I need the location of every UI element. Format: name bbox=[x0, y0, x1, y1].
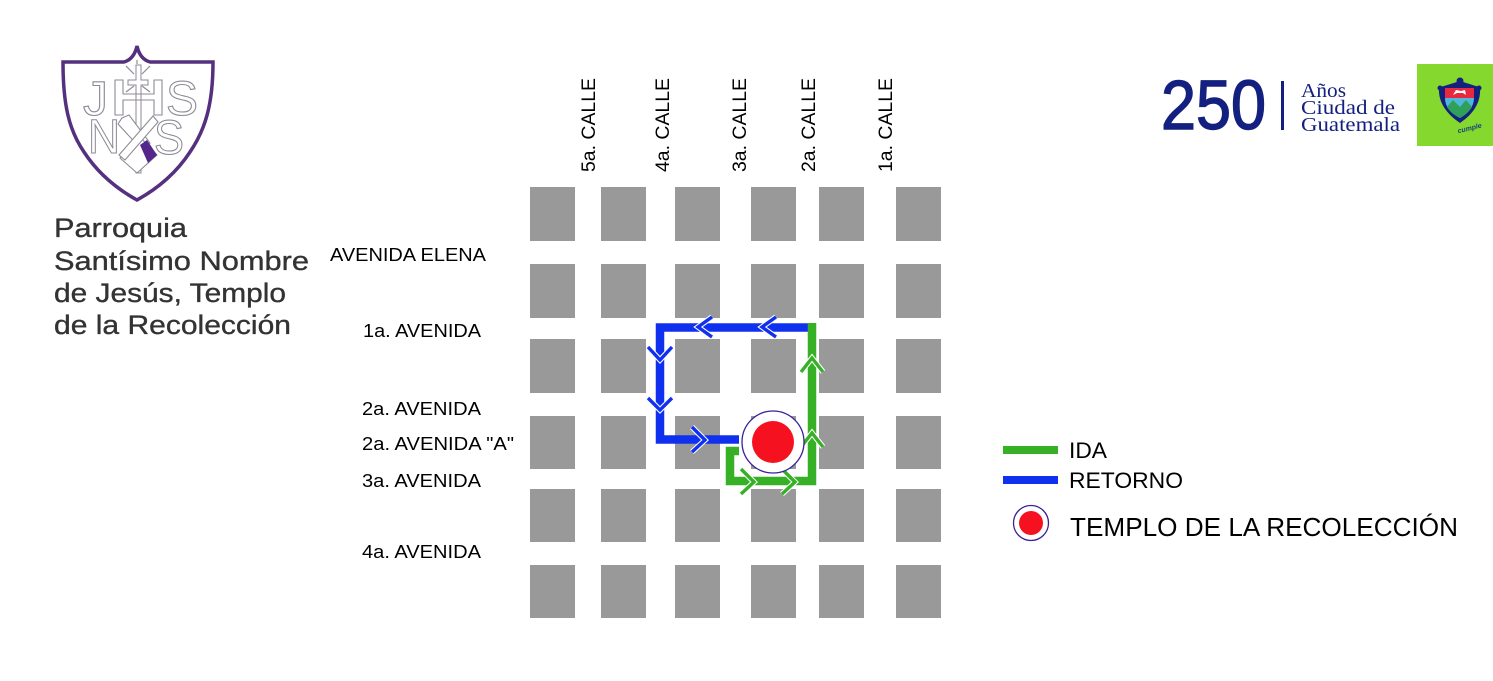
heading: parish name: de la Recolección bbox=[54, 310, 291, 340]
street labels: avenidas: 2a. AVENIDA bbox=[362, 398, 482, 419]
street labels: avenidas bbox=[330, 244, 514, 562]
street labels: avenidas: 1a. AVENIDA bbox=[363, 320, 482, 341]
street labels: avenidas: AVENIDA ELENA bbox=[330, 244, 487, 265]
logo: parish shield: S bbox=[154, 112, 184, 165]
logo: parish shield bbox=[63, 46, 213, 200]
route: retorno (blue) bbox=[648, 317, 808, 452]
logo: parish shield: J bbox=[83, 73, 108, 126]
logo: 250 años Ciudad de Guatemala: Guatemala bbox=[1301, 114, 1400, 136]
logo: 250 años Ciudad de Guatemala: 250 bbox=[1161, 66, 1266, 144]
legend item: retorno bbox=[1003, 468, 1183, 493]
street labels: avenidas: 3a. AVENIDA bbox=[362, 470, 482, 491]
street labels: avenidas: 2a. AVENIDA "A" bbox=[362, 433, 514, 454]
legend item: ida: IDA bbox=[1069, 438, 1107, 463]
logo: parish shield: N bbox=[88, 111, 120, 164]
logo: Guatemala city crest on green: cumple bbox=[1457, 122, 1483, 135]
route: ida (green) bbox=[730, 323, 823, 494]
heading: parish name bbox=[54, 213, 309, 340]
legend item: ida bbox=[1003, 438, 1107, 463]
street labels: avenidas: 4a. AVENIDA bbox=[362, 541, 482, 562]
logo: Guatemala city crest on green bbox=[1417, 64, 1493, 146]
heading: parish name: de Jesús, Templo bbox=[54, 278, 286, 308]
logo: parish shield: S bbox=[166, 73, 198, 126]
legend item: templo bbox=[1014, 506, 1458, 542]
legend item: retorno: RETORNO bbox=[1069, 468, 1183, 493]
logo: 250 años Ciudad de Guatemala bbox=[1161, 66, 1400, 144]
legend bbox=[1003, 438, 1458, 542]
city block grid bbox=[530, 187, 941, 618]
logo: 250 años Ciudad de Guatemala: Ciudad de bbox=[1301, 97, 1395, 119]
heading: parish name: Parroquia bbox=[54, 213, 188, 243]
street labels: calles: 2a. CALLE bbox=[799, 78, 820, 172]
logo: 250 años Ciudad de Guatemala: Años bbox=[1301, 80, 1346, 102]
street labels: calles: 5a. CALLE bbox=[579, 78, 600, 172]
marker: Templo de la Recolección bbox=[742, 411, 804, 473]
heading: parish name: Santísimo Nombre bbox=[54, 246, 309, 276]
street labels: calles: 4a. CALLE bbox=[653, 78, 674, 172]
legend item: templo: TEMPLO DE LA RECOLECCIÓN bbox=[1070, 513, 1458, 542]
street labels: calles: 3a. CALLE bbox=[730, 78, 751, 172]
street labels: calles bbox=[579, 78, 897, 172]
street labels: calles: 1a. CALLE bbox=[876, 78, 897, 172]
